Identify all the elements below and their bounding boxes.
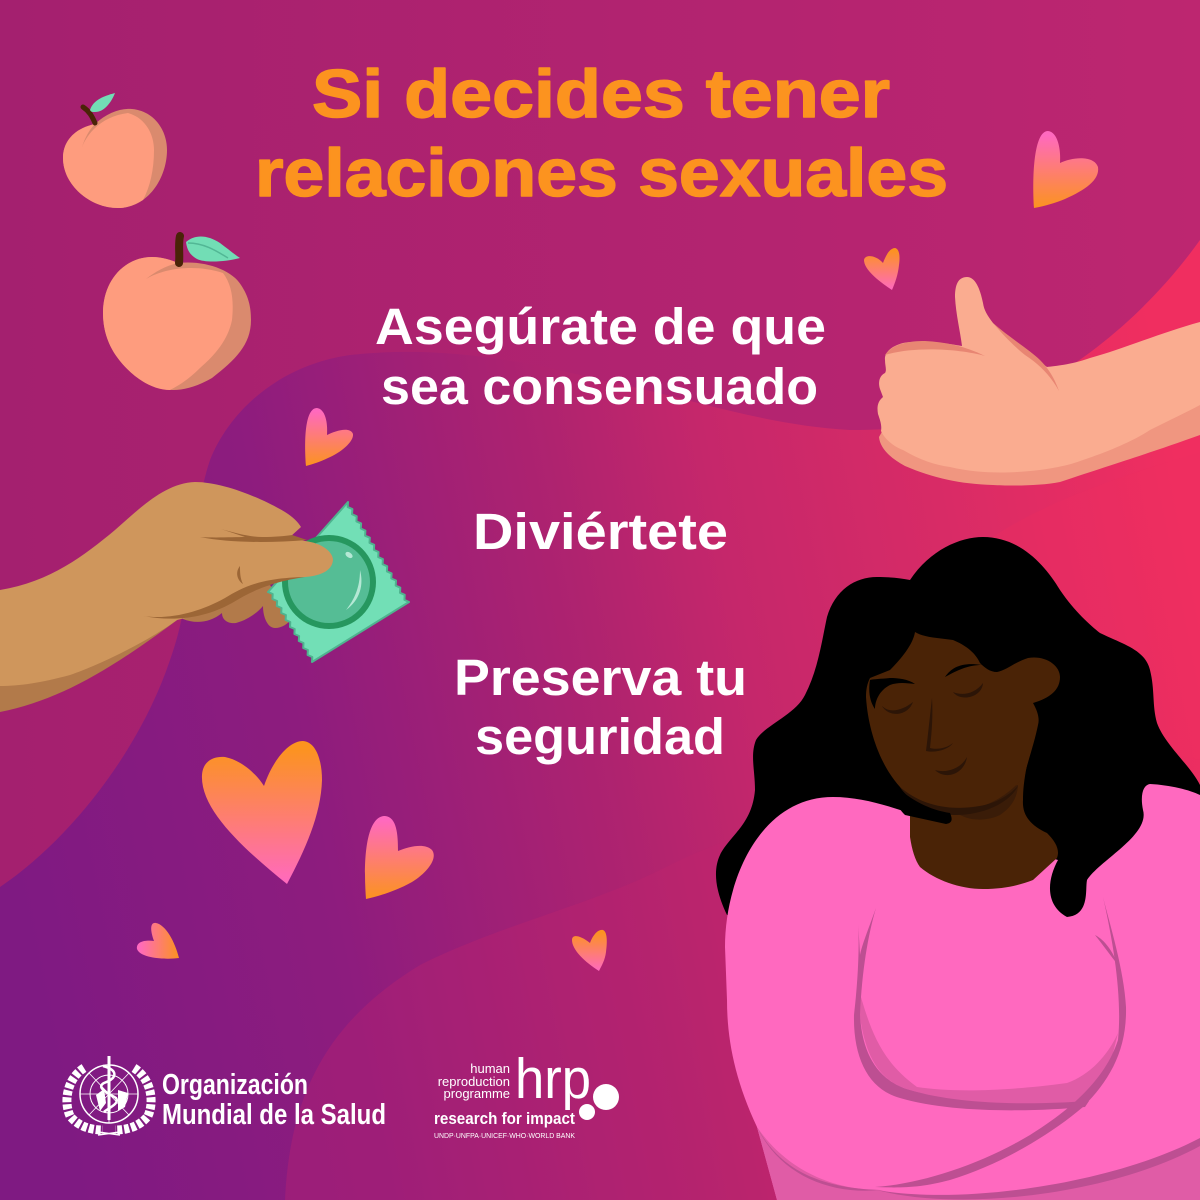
- logo: WHO emblem: [67, 1056, 151, 1135]
- forearm shadow: [0, 560, 180, 712]
- logo: HRP: research for impact: [434, 1110, 575, 1128]
- text: safety: [454, 649, 747, 765]
- icon: heart top right: [1033, 131, 1098, 208]
- eyebrows and fringe: [869, 664, 982, 709]
- text: enjoy: Diviértete: [473, 503, 728, 560]
- hair: [716, 537, 1200, 935]
- finger crease: [200, 529, 307, 542]
- logo: HRP: programme: [444, 1086, 510, 1101]
- icon: large peach: [103, 236, 251, 390]
- condom packet: [268, 502, 409, 662]
- chin crease: [900, 786, 1018, 815]
- logo: HRP: hrp: [515, 1047, 591, 1111]
- sweater: [725, 784, 1200, 1200]
- icon: heart small near thumb: [864, 248, 900, 290]
- icon: small heart bottom centre: [572, 930, 607, 971]
- text: consent: sea consensuado: [381, 358, 818, 415]
- logo: HRP: reproduction: [438, 1074, 510, 1089]
- icon: thumbs up hand: [878, 277, 1200, 486]
- icon: hand holding condom: [0, 482, 409, 712]
- logo: HRP: [434, 1047, 619, 1140]
- sweater lower shade: [757, 1127, 1200, 1200]
- icon: heart above condom: [305, 408, 353, 466]
- hair band over neck: [894, 785, 952, 824]
- logo text: WHO: [162, 1069, 386, 1131]
- lower fingers: [178, 585, 292, 628]
- text: consent: Asegúrate de que: [375, 298, 826, 355]
- logo text: WHO: Organización: [162, 1069, 308, 1101]
- closed eyes, nose and mouth: [882, 683, 983, 775]
- sweater creases: [757, 897, 1200, 1199]
- icon: big heart: [202, 741, 322, 884]
- icon: small peach: [63, 93, 167, 208]
- hand: [0, 482, 333, 686]
- title: [255, 56, 948, 211]
- logo text: WHO: Mundial de la Salud: [162, 1099, 386, 1131]
- title: Si decides tener: [312, 56, 890, 132]
- woman illustration: [716, 537, 1200, 1200]
- title: relaciones sexuales: [255, 135, 948, 211]
- icon: medium heart: [365, 816, 434, 899]
- text: safety: seguridad: [475, 708, 725, 765]
- icon: small heart bottom left: [137, 923, 179, 959]
- logo: HRP: human: [470, 1061, 510, 1076]
- face: [866, 632, 1060, 808]
- text: consent: [375, 298, 826, 415]
- text: safety: Preserva tu: [454, 649, 747, 706]
- neck: [910, 765, 1058, 889]
- logo: HRP: UNDP·UNFPA·UNICEF·WHO·WORLD BANK: [434, 1133, 575, 1140]
- chin shadow: [950, 785, 1018, 820]
